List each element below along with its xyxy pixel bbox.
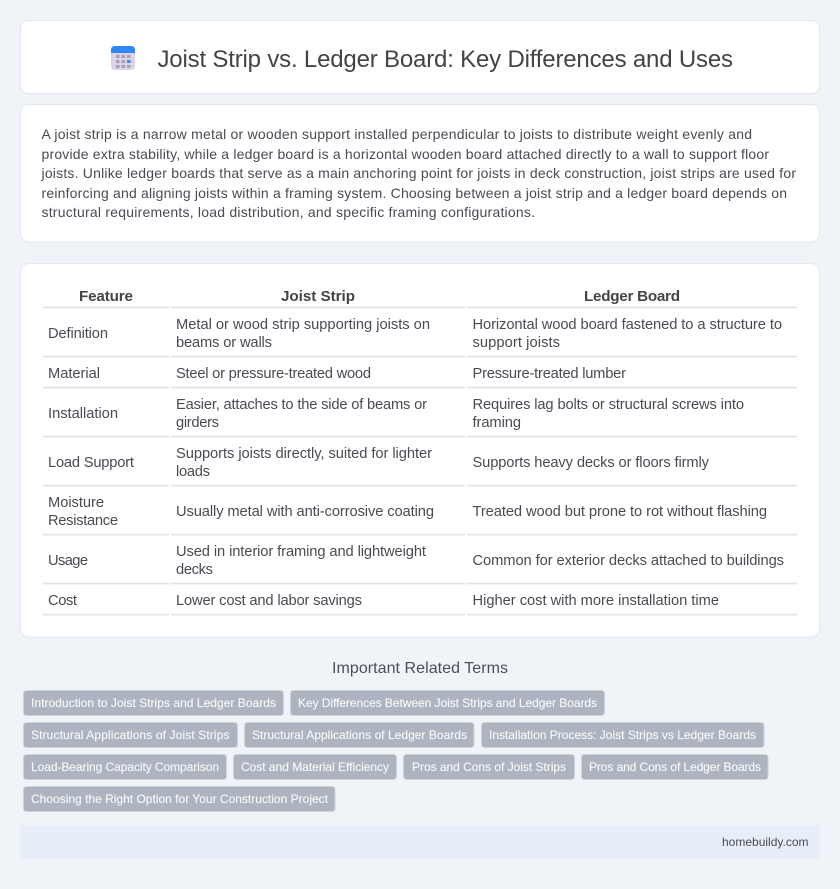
row: material — [48, 366, 626, 382]
row: installation: Requires lag bolts or structural screws into — [472, 397, 744, 413]
row: moisture resistance — [48, 495, 767, 529]
related terms tags — [24, 690, 768, 812]
row: cost: Higher cost with more installation time — [472, 593, 719, 609]
row: material: Material — [48, 366, 100, 382]
row: load support: Supports heavy decks or floors firmly — [472, 455, 710, 471]
row: moisture resistance: Treated wood but prone to rot without flashing — [472, 504, 767, 520]
table header row: Ledger Board — [584, 288, 680, 305]
tag — [24, 722, 238, 748]
tag — [404, 754, 574, 780]
row: definition: Horizontal wood board fastened to a structure to — [472, 317, 782, 333]
intro text block: structural requirements, load distribution, and specific framing configurations. — [42, 204, 535, 220]
intro text block: provide extra stability, while a ledger board is a horizontal wooden board attached directly to a wall to support floor — [42, 146, 769, 162]
row: moisture resistance: Resistance — [48, 513, 118, 529]
tag: Installation Process: Joist Strips vs Ledger Boards — [489, 728, 756, 742]
row: installation — [48, 397, 744, 431]
tag: Choosing the Right Option for Your Construction Project — [31, 792, 329, 806]
row: installation: girders — [176, 415, 219, 431]
title: Joist Strip vs. Ledger Board: Key Differences and Uses — [158, 46, 733, 73]
row: cost: Lower cost and labor savings — [176, 593, 362, 609]
row: installation: Easier, attaches to the side of beams or — [176, 397, 427, 413]
panel: introduction — [20, 104, 820, 242]
row: material: Pressure-treated lumber — [472, 366, 626, 382]
row: definition — [48, 317, 782, 351]
heading: important related terms: Important Related Terms — [332, 660, 508, 677]
tag — [244, 722, 474, 748]
tag: Load-Bearing Capacity Comparison — [31, 760, 219, 774]
row: usage — [48, 544, 784, 578]
intro text block: joists. Unlike ledger boards that serve as a main anchoring point for joists in deck construction, joist strips are used for — [40, 165, 796, 181]
tag: Introduction to Joist Strips and Ledger Boards — [31, 696, 276, 710]
row: load support: Load Support — [48, 455, 134, 471]
row: usage: Used in interior framing and lightweight — [176, 544, 426, 560]
tag — [24, 754, 226, 780]
table header row: Joist Strip — [281, 288, 355, 305]
row: usage: decks — [176, 562, 213, 578]
row: definition: support joists — [472, 335, 560, 351]
panel: comparison table — [20, 264, 820, 637]
row: cost: Cost — [48, 593, 77, 609]
tag — [582, 754, 768, 780]
tag: Structural Applications of Ledger Boards — [252, 728, 467, 742]
intro text block: A joist strip is a narrow metal or wooden support installed perpendicular to joists to distribute weight evenly and — [42, 126, 752, 142]
row: installation: framing — [472, 415, 521, 431]
tag — [290, 690, 604, 716]
footer site name: homebuildy.com — [722, 835, 808, 849]
row: material: Steel or pressure-treated wood — [176, 366, 371, 382]
tag: Pros and Cons of Ledger Boards — [589, 760, 761, 774]
tag — [24, 786, 335, 812]
row: load support: loads — [176, 464, 210, 480]
row: installation: Installation — [48, 406, 118, 422]
row: definition: Metal or wood strip supporting joists on — [176, 317, 430, 333]
tag: Cost and Material Efficiency — [241, 760, 389, 774]
tag: Structural Applications of Joist Strips — [31, 728, 230, 742]
table header row: Feature — [79, 288, 133, 305]
footer — [20, 825, 820, 859]
row: moisture resistance: Moisture — [48, 495, 104, 511]
intro text block — [40, 126, 796, 220]
tag — [482, 722, 764, 748]
row: load support — [48, 446, 710, 480]
tag — [234, 754, 396, 780]
intro text block: reinforcing and aligning joists within a framing system. Choosing between a joist strip and a ledger board depends on — [42, 185, 787, 201]
tag: Pros and Cons of Joist Strips — [412, 760, 566, 774]
row: definition: beams or walls — [176, 335, 272, 351]
icon: calendar — [111, 46, 135, 70]
row: definition: Definition — [48, 326, 108, 342]
row: load support: Supports joists directly, suited for lighter — [176, 446, 432, 462]
row: usage: Usage — [48, 553, 88, 569]
row: cost — [48, 593, 719, 609]
row: usage: Common for exterior decks attached to buildings — [472, 553, 784, 569]
header panel — [20, 20, 820, 94]
tag — [24, 690, 284, 716]
table header row — [79, 288, 680, 305]
row: moisture resistance: Usually metal with anti-corrosive coating — [176, 504, 434, 520]
tag: Key Differences Between Joist Strips and Ledger Boards — [298, 696, 597, 710]
